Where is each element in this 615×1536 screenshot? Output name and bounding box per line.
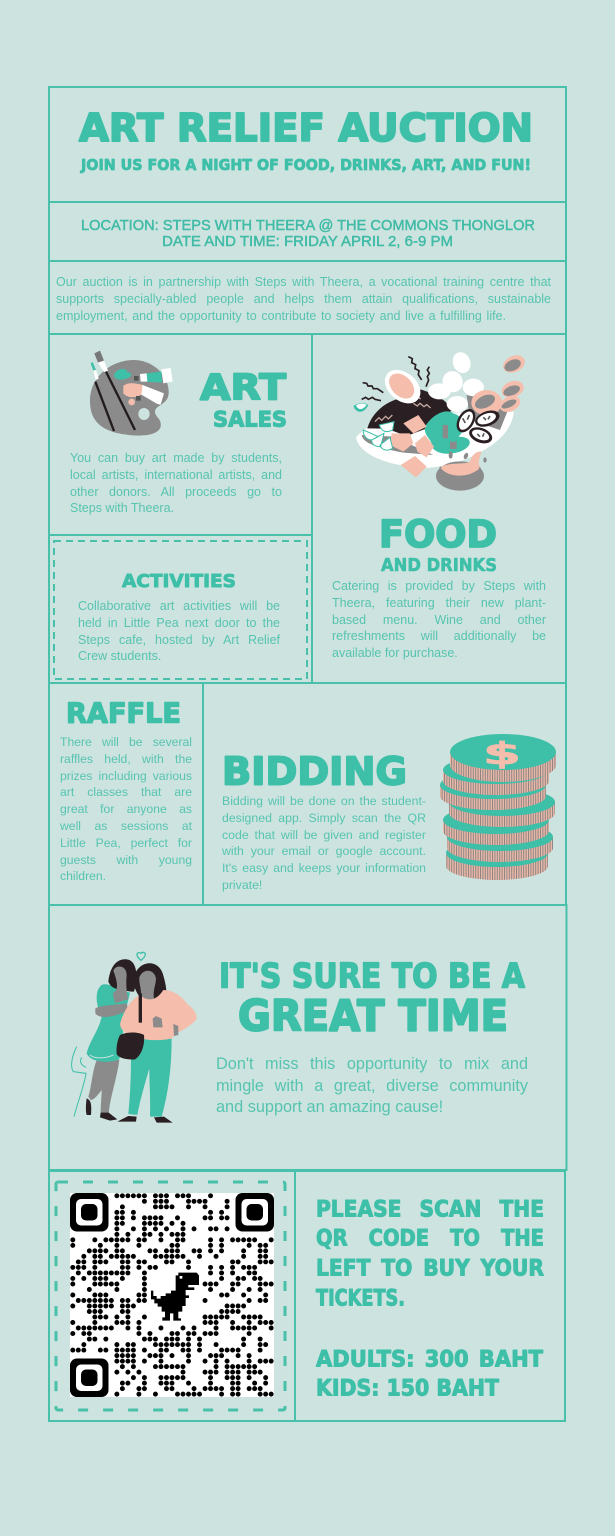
panel: qr code: [49, 1171, 295, 1421]
raffle text: art classes that are: [60, 785, 192, 799]
activities text: [78, 598, 280, 668]
food text: based menu. Wine and other: [332, 613, 546, 627]
heading: bidding: BIDDING: [222, 750, 407, 794]
food text: refreshments will additionally be: [332, 629, 546, 643]
raffle text: There will be several: [60, 735, 192, 749]
raffle text: prizes including various: [60, 769, 192, 783]
panel: art sales: [49, 334, 312, 535]
great time text: mingle with a great, diverse community: [216, 1076, 528, 1094]
bidding text: It's easy and keeps your information: [222, 861, 426, 875]
great time text: Don't miss this opportunity to mix and: [216, 1055, 528, 1073]
food text: Theera, featuring their new plant-: [332, 596, 546, 610]
great time text: [216, 1054, 528, 1120]
food text: available for purchase.: [332, 646, 458, 660]
date and time: DATE AND TIME: FRIDAY APRIL 2, 6-9 PM: [162, 233, 453, 250]
ticket prices: ADULTS: 300 BAHT: [316, 1348, 543, 1372]
heading: food: FOOD: [379, 512, 497, 556]
panel: activities: [49, 535, 312, 683]
ticket instructions: PLEASE SCAN THE: [316, 1198, 544, 1222]
heading: art: ART: [200, 368, 286, 408]
art sales text: Steps with Theera.: [70, 501, 174, 515]
dollar sign: $: [483, 737, 521, 772]
panel: bidding: [203, 683, 566, 905]
bidding text: code that will be given and register: [222, 828, 426, 842]
panel: great time: [49, 905, 566, 1170]
activities text: Steps cafe, hosted by Art Relief: [78, 633, 280, 647]
icon: food bowl: [353, 350, 528, 491]
raffle text: well as sessions at: [60, 819, 192, 833]
dashed frame: [54, 541, 307, 679]
illustration: two friends: [72, 952, 197, 1123]
bidding text: Bidding will be done on the student-: [222, 794, 426, 808]
raffle text: raffles held, with the: [60, 752, 192, 766]
finder: top right: [236, 1193, 274, 1232]
heading: raffle: RAFFLE: [66, 696, 181, 730]
art sales text: other donors. All proceeds go to: [70, 485, 282, 499]
raffle text: great for anyone as: [60, 802, 192, 816]
panel: title: [49, 87, 566, 202]
raffle text: guests with young: [60, 853, 192, 867]
intro text: Our auction is in partnership with Steps with Theera, a vocational training centre that: [56, 275, 551, 289]
icon: paint palette: [90, 351, 173, 436]
dashed frame: [56, 1182, 285, 1410]
ticket instructions: LEFT TO BUY YOUR: [316, 1256, 544, 1282]
bidding text: [222, 793, 426, 897]
art sales text: You can buy art made by students,: [70, 451, 282, 465]
activities text: held in Little Pea next door to the: [78, 616, 280, 630]
art sales text: [70, 450, 282, 520]
food text: [332, 578, 546, 666]
activities text: Crew students.: [78, 649, 161, 663]
subtitle: JOIN US FOR A NIGHT OF FOOD, DRINKS, ART, AND FUN!: [80, 156, 531, 174]
panel: raffle: [49, 683, 203, 905]
intro text: supports specially-abled people and helps them attain qualifications, sustainable: [56, 292, 551, 306]
panel: tickets: [295, 1171, 565, 1421]
intro text: [56, 274, 551, 326]
panel: location and date: [49, 202, 566, 261]
icon: coin stack: [440, 734, 556, 880]
raffle text: children.: [60, 869, 106, 883]
art sales text: local artists, international artists, and: [70, 468, 282, 482]
ticket instructions: TICKETS.: [316, 1286, 405, 1312]
intro text: employment, and the opportunity to contribute to society and live a fulfilling life.: [56, 309, 506, 323]
bidding text: private!: [222, 878, 262, 892]
raffle text: [60, 734, 192, 889]
heading: great time: GREAT TIME: [238, 992, 508, 1042]
heading: sales: SALES: [213, 408, 287, 432]
qr code: [70, 1193, 274, 1397]
ticket prices: KIDS: 150 BAHT: [316, 1376, 499, 1402]
ticket instructions: QR CODE TO THE: [316, 1226, 544, 1252]
title: ART RELIEF AUCTION: [79, 106, 533, 151]
ticket instructions: [316, 1198, 544, 1312]
bidding text: with your email or google account.: [222, 844, 426, 858]
icon: dinosaur: [151, 1273, 199, 1321]
food text: Catering is provided by Steps with: [332, 579, 546, 593]
heading: it's sure to be a: IT'S SURE TO BE A: [219, 956, 525, 996]
activities text: Collaborative art activities will be: [78, 599, 280, 613]
finder: bottom left: [70, 1358, 108, 1397]
panel: introduction: [49, 261, 566, 334]
raffle text: Little Pea, perfect for: [60, 836, 192, 850]
ticket prices: [316, 1348, 543, 1402]
heading: and drinks: AND DRINKS: [381, 556, 497, 576]
panel: food and drinks: [312, 334, 566, 683]
great time text: and support an amazing cause!: [216, 1098, 443, 1116]
location: LOCATION: STEPS WITH THEERA @ THE COMMONS THONGLOR: [81, 217, 535, 234]
finder: top left: [70, 1193, 108, 1232]
heading: activities: ACTIVITIES: [122, 572, 236, 592]
bidding text: designed app. Simply scan the QR: [222, 811, 426, 825]
